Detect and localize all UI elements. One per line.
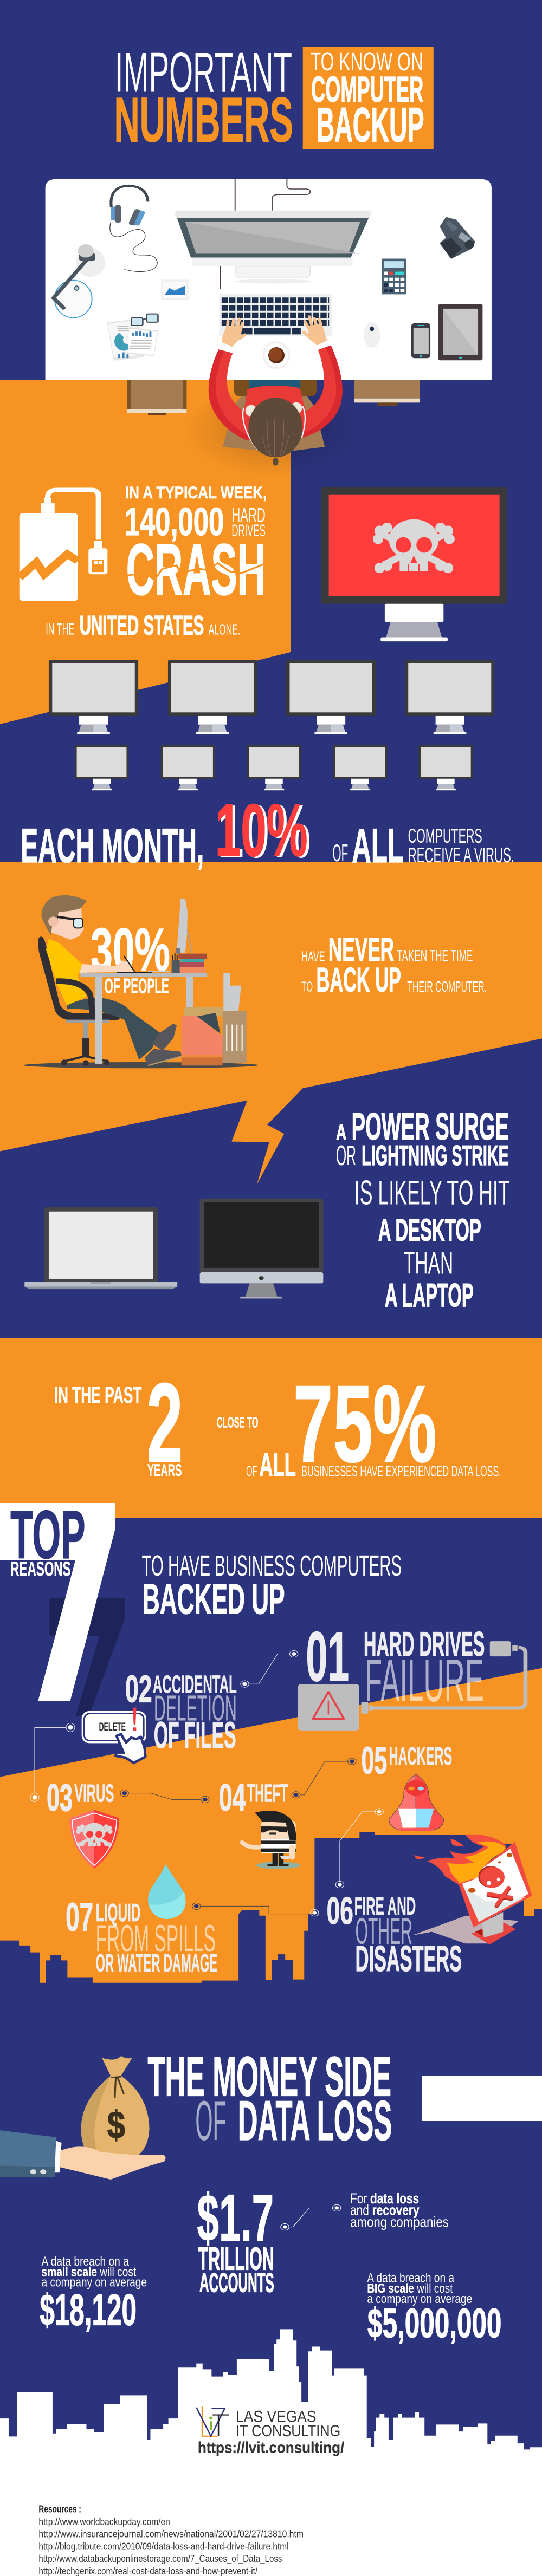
chair armrest [56,981,93,1014]
orange panel with lightning bolt [0,862,542,1185]
big white seven [0,1503,115,1701]
illustration: man working at desk [23,895,259,1068]
phone [411,323,430,358]
text: crash statistic: UNITED STATES [80,610,204,641]
monitor screen [459,1842,532,1927]
logo: las vegas it consulting: https://lvit.consulting/ [198,2439,344,2456]
stat: small scale breach: A data breach on a [42,2254,129,2268]
resources list: Resources : [38,2504,81,2515]
papers and glasses [107,314,158,361]
reason 07 liquid from spills [66,1895,217,1977]
floor shadow [23,1062,259,1068]
money statistics: TRILLION [198,2241,274,2277]
resources list: http://blog.tribute.com/2010/09/data-loss-and-hard-drive-failure.html [38,2541,289,2552]
cup of coffee [263,342,290,369]
reason 01 hard drives failure: 01 [306,1617,349,1696]
camera [440,217,475,259]
money bag: $ [107,2104,125,2146]
reason 06 fire and other disasters: OTHER [356,1911,412,1952]
logo: las vegas it consulting: LAS VEGAS [236,2408,317,2425]
hard drive crash stat panel: HARD [231,504,266,526]
text: to have business computers backed up: BACKED UP [143,1575,285,1623]
callout: data loss and recovery: among companies [350,2215,449,2230]
chair [223,380,325,451]
reason 03 virus: 03 [47,1776,73,1819]
text: power surge claim [336,1105,510,1314]
office chair [38,936,121,1066]
stat: big scale breach [367,2271,501,2346]
navy city skyline over orange panel [0,1832,542,2037]
head with hair [248,398,302,466]
top 7 reasons heading: OF FILES [154,1715,236,1756]
icon: hooded hacker [389,1774,443,1831]
calculator [382,259,406,294]
text: of people and never backed up: HAVE [301,949,325,965]
text: of people and never backed up: OF PEOPLE [105,974,169,998]
reason 05 hackers: 05 [362,1739,387,1782]
money bag [81,2056,150,2159]
soft shadow under person [184,380,369,478]
text: crash statistic: IN THE [46,621,74,638]
desk with tablet and monitor [80,899,207,1064]
reasons 03 to 07 labels and connectors: FROM SPILLS [96,1917,216,1960]
stat: small scale breach: $18,120 [40,2285,137,2334]
text: crash statistic: 140,000 [125,500,224,544]
desk drawers [127,380,420,415]
sleeve [0,2130,62,2177]
resources list: http://www.insurancejournal.com/news/national/2001/02/27/13810.htm [38,2528,304,2540]
stat: 1.7 trillion accounts [197,2182,274,2298]
tablet [438,304,482,360]
text: power surge claim: A [336,1120,346,1144]
connector 07 to 06 [192,1903,319,1916]
resources list: http://www.worldbackupday.com/en [38,2516,170,2528]
infected monitor with skull [321,487,507,641]
stat: big scale breach: a company on average [367,2291,472,2306]
small chart card [161,279,189,300]
logo: las vegas it consulting: IT CONSULTING [236,2422,340,2440]
callout: data loss and recovery: For data loss [350,2191,419,2207]
grid of monitors: small row [75,745,473,790]
text: of people and never backed up: BACK UP [317,961,401,999]
headphone ear pads and wires [243,402,305,450]
reason 06 fire and other disasters: FIRE AND [354,1893,416,1921]
75 percent data loss stat: IN THE PAST [54,1382,142,1408]
icon: external hard drive [20,490,107,601]
callout: data loss and recovery: and recovery [350,2203,420,2219]
text: each month 10 percent of all computers receive a virus: ALL [352,819,404,873]
man's torso [46,939,87,1006]
reasons 03 to 07 labels and connectors: OR WATER DAMAGE [96,1949,217,1977]
white desk top [46,179,492,380]
delete button with pointing hand: DELETE [99,1720,126,1733]
connector 04 to 05 [292,1758,356,1798]
75 percent data loss stat: YEARS [147,1461,182,1480]
monitor cables [221,179,310,289]
paper bin and folder box [182,973,247,1065]
logo: las vegas it consulting [196,2406,344,2456]
connector 05 to 06 [335,1809,383,1888]
75 percent data loss stat: OF [246,1463,257,1479]
reasons 03 to 07 labels and connectors: THEFT [247,1780,288,1807]
text: crash statistic [46,484,267,641]
orange panel behind top reasons [0,1668,542,1983]
connector 03 to 04 [120,1790,209,1803]
icon: laptop [24,1207,177,1289]
reason 07 liquid from spills: 07 [66,1895,93,1940]
reason 02 accidental deletion of files: 02 [125,1668,152,1710]
keyboard [219,294,332,336]
reasons 03 to 07 labels and connectors [47,1739,462,1979]
text: each month 10 percent of all computers receive a virus: EACH MONTH, [21,819,204,873]
red sweater [209,342,343,440]
text: each month 10 percent of all computers receive a virus: 10% [215,789,308,871]
header title block: TO KNOW ON [311,47,423,76]
text: top reasons: REASONS [10,1558,71,1580]
top 7 reasons heading: DELETION [154,1688,237,1729]
hard drive crash stat panel: CRASH [126,529,266,610]
text: power surge claim: OR [336,1140,356,1172]
illustration: desk seen from above [46,179,492,415]
connector to callout [281,2204,341,2230]
icon: desktop computer [200,1199,323,1298]
monitor stand [471,1912,516,1944]
hands on keyboard [222,317,327,347]
orange band behind 75 percent stat [0,1338,542,1518]
hard drive crash stat panel [20,484,514,873]
header title block: IMPORTANT [115,41,292,103]
man's arm with pen [80,956,134,973]
person at desk seen from above [209,317,343,466]
icon: virus shield with skull [69,1810,119,1869]
icon: pointing hand [115,1734,145,1763]
stat: big scale breach: A data breach on a [367,2271,454,2285]
power surge section [24,1105,510,1314]
grid of monitors: large row [49,660,494,734]
money statistics [38,2182,501,2576]
headphones [110,186,157,272]
75 percent data loss stat: ALL [259,1446,296,1483]
stat: big scale breach: BIG scale will cost [367,2281,453,2295]
reason 06 fire and other disasters [327,1889,462,1979]
white city skyline footer [0,2329,542,2576]
mouse [364,322,380,348]
red skull on screen [478,1866,511,1906]
open hand [60,2146,166,2180]
resources list [38,2504,304,2576]
text: top reasons [10,1497,86,1580]
text: each month 10 percent of all computers receive a virus [21,789,514,873]
money statistics: $1.7 [197,2182,274,2255]
text: of people and never backed up: NEVER [328,931,394,968]
75 percent data loss stat: 2 [146,1359,183,1486]
reason 06 fire and other disasters: 06 [327,1889,353,1932]
text: power surge claim: THAN [404,1245,453,1280]
big seven shadow [49,1598,125,1717]
text: each month 10 percent of all computers receive a virus: OF [333,840,348,867]
text: crash statistic: IN A TYPICAL WEEK, [125,484,267,502]
text: of people and never backed up: TO [301,979,313,995]
top 7 reasons heading [0,1497,525,1756]
resources list: http://www.databackuponlinestorage.com/7_Causes_of_Data_Loss [38,2553,282,2564]
stat: small scale breach: a company on average [42,2274,147,2289]
stat: small scale breach [40,2254,147,2334]
money side heading: OF [195,2089,227,2152]
reason 02 accidental deletion of files [125,1668,237,1756]
desktop monitor [175,211,371,283]
monitor shadow [412,1916,519,1943]
75 percent data loss stat: CLOSE TO [217,1414,258,1431]
money side heading [147,2045,392,2152]
text: 30 percent number: 30% [91,916,170,983]
text: each month 10 percent of all computers receive a virus: 10% [218,790,311,873]
reasons 03 to 07 labels and connectors: VIRUS [74,1780,114,1807]
man's head with glasses [42,895,87,940]
icon: money bag on hand [0,2056,166,2180]
reason 05 hackers [362,1739,452,1782]
desk lamp [54,244,105,318]
connector 02 to 01 [241,1650,298,1687]
hard drive crash stat panel: DRIVES [231,521,266,540]
text: to have business computers backed up [141,1550,402,1623]
header title block: NUMBERS [114,85,293,155]
text: HACKERS [389,1743,452,1771]
icon: masked thief [242,1811,300,1869]
header title block [114,41,434,155]
callout: data loss and recovery [350,2191,449,2230]
top 7 reasons heading: ACCIDENTAL [153,1671,237,1699]
connector 02 to 03 [30,1723,75,1801]
stat: small scale breach: small scale will cost [42,2264,136,2279]
money statistics: ACCOUNTS [199,2267,274,2298]
reason 07 liquid from spills: LIQUID [96,1899,141,1927]
white tag right of heading [422,2076,542,2121]
text: of people and never backed up [105,931,487,999]
icon: burning monitor with skull [412,1835,532,1944]
orange angled panel behind hard drive stat [0,380,291,724]
icon: water drop [148,1864,185,1919]
top 7 reasons heading: TOP [10,1497,86,1573]
text: crash statistic: ALONE. [209,621,240,638]
reason 01 hard drives failure [298,1617,525,1731]
man's legs and shoes [67,998,182,1066]
flames [414,1835,507,1885]
delete button with pointing hand [82,1708,146,1763]
75 percent data loss stat [54,1359,501,1486]
reason 04 theft: 04 [219,1776,246,1819]
